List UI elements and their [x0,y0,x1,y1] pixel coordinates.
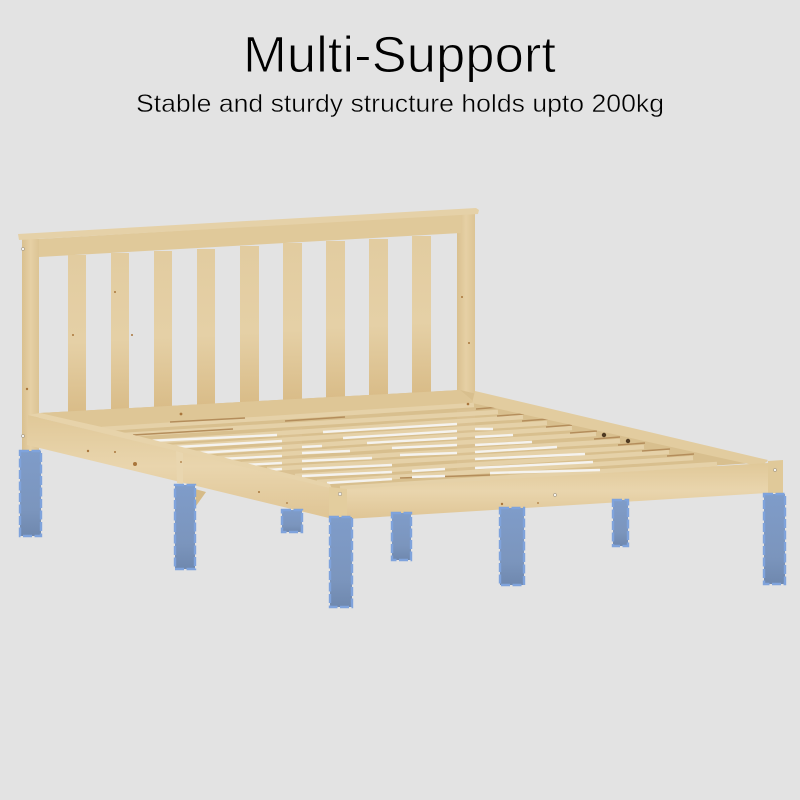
leg: front right [764,494,785,584]
support beams [282,409,475,481]
leg: left middle [175,485,195,569]
corner bracket [195,489,206,506]
leg: front corner [330,517,352,607]
leg: rear centre [282,510,302,532]
right post [457,214,475,402]
back rail [40,390,472,427]
slatted deck [40,390,768,490]
right end post [768,460,783,493]
top board [18,208,479,240]
leg: back left [20,451,41,536]
bed frame [18,208,783,520]
subtitle: Stable and sturdy structure holds upto 200kg [136,90,664,118]
leg: rear right [613,500,628,546]
left rail joint [176,451,183,484]
slat shadows [133,407,694,478]
front rail [347,463,768,519]
highlighted legs [20,451,785,607]
title: Multi-Support [243,26,556,83]
leg: front centre inner [392,513,411,560]
left side rail top [28,413,332,489]
headboard slats [68,236,431,413]
front corner post [329,487,347,520]
left post [22,239,39,451]
knots and screws [21,247,777,505]
top rail [39,214,461,257]
headboard [18,208,479,451]
gaps between slats [147,424,600,483]
right side rail [472,391,768,465]
deck base [40,390,768,490]
deck slats [102,405,717,488]
leg: front middle [500,508,524,585]
left side rail [27,415,330,518]
